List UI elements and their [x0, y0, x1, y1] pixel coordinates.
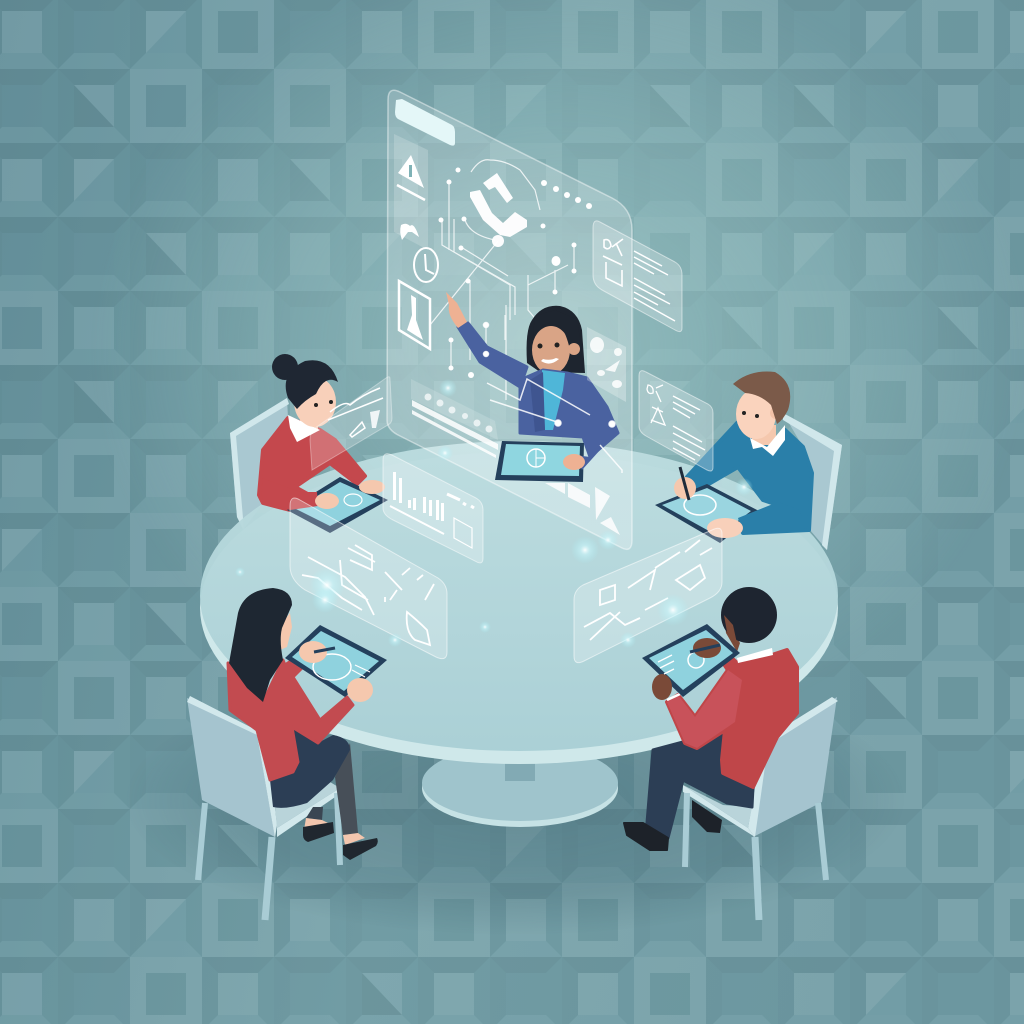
glass panel: upper right notes	[593, 221, 682, 332]
main screen header bar	[395, 99, 455, 146]
main screen clock icon	[414, 248, 438, 282]
holographic panel: main large screen	[387, 90, 632, 549]
sleeve and hands on back left tablet	[262, 478, 385, 510]
glass panel: bar chart	[383, 454, 483, 563]
bar chart bars	[393, 472, 444, 521]
glass panel: right circuit diagram	[574, 528, 722, 663]
floor shadow	[125, 665, 905, 935]
person: woman in red, back left	[259, 354, 365, 510]
glass panel: left pattern beside woman	[310, 377, 392, 470]
chair: back left	[230, 398, 289, 530]
chair: front left	[187, 696, 341, 920]
main screen connection nodes	[438, 168, 576, 378]
tablet: front right	[642, 624, 740, 700]
sparkle lights	[235, 379, 753, 648]
background glow	[90, 0, 1024, 750]
table pedestal	[422, 745, 618, 827]
table	[200, 441, 838, 764]
person: man front right, from behind	[624, 587, 797, 850]
glass panel: small shapes beside presenter	[587, 327, 626, 402]
main screen circuit lines	[430, 160, 574, 400]
chair: front right	[683, 697, 838, 920]
main screen flask icon	[399, 281, 430, 349]
glass panel: left circuit diagram	[290, 498, 447, 659]
tablet: back left	[287, 477, 388, 533]
tablet: front left	[285, 625, 387, 702]
main screen lower slider bars	[411, 379, 498, 458]
main screen warning sidebar	[394, 134, 428, 250]
center tablet	[495, 441, 600, 482]
tablet: back right	[655, 467, 805, 543]
chair: back right	[783, 413, 842, 550]
main screen dot row	[541, 180, 592, 209]
main screen lower triangles	[545, 483, 620, 535]
hologram lines over presenter	[484, 322, 622, 473]
glass panel: right document	[639, 371, 713, 471]
main screen central gear symbol	[470, 173, 527, 247]
person: woman front left, from behind	[228, 588, 378, 860]
person: presenter (back centre)	[446, 292, 618, 457]
person: man in blue, back right	[687, 372, 812, 533]
